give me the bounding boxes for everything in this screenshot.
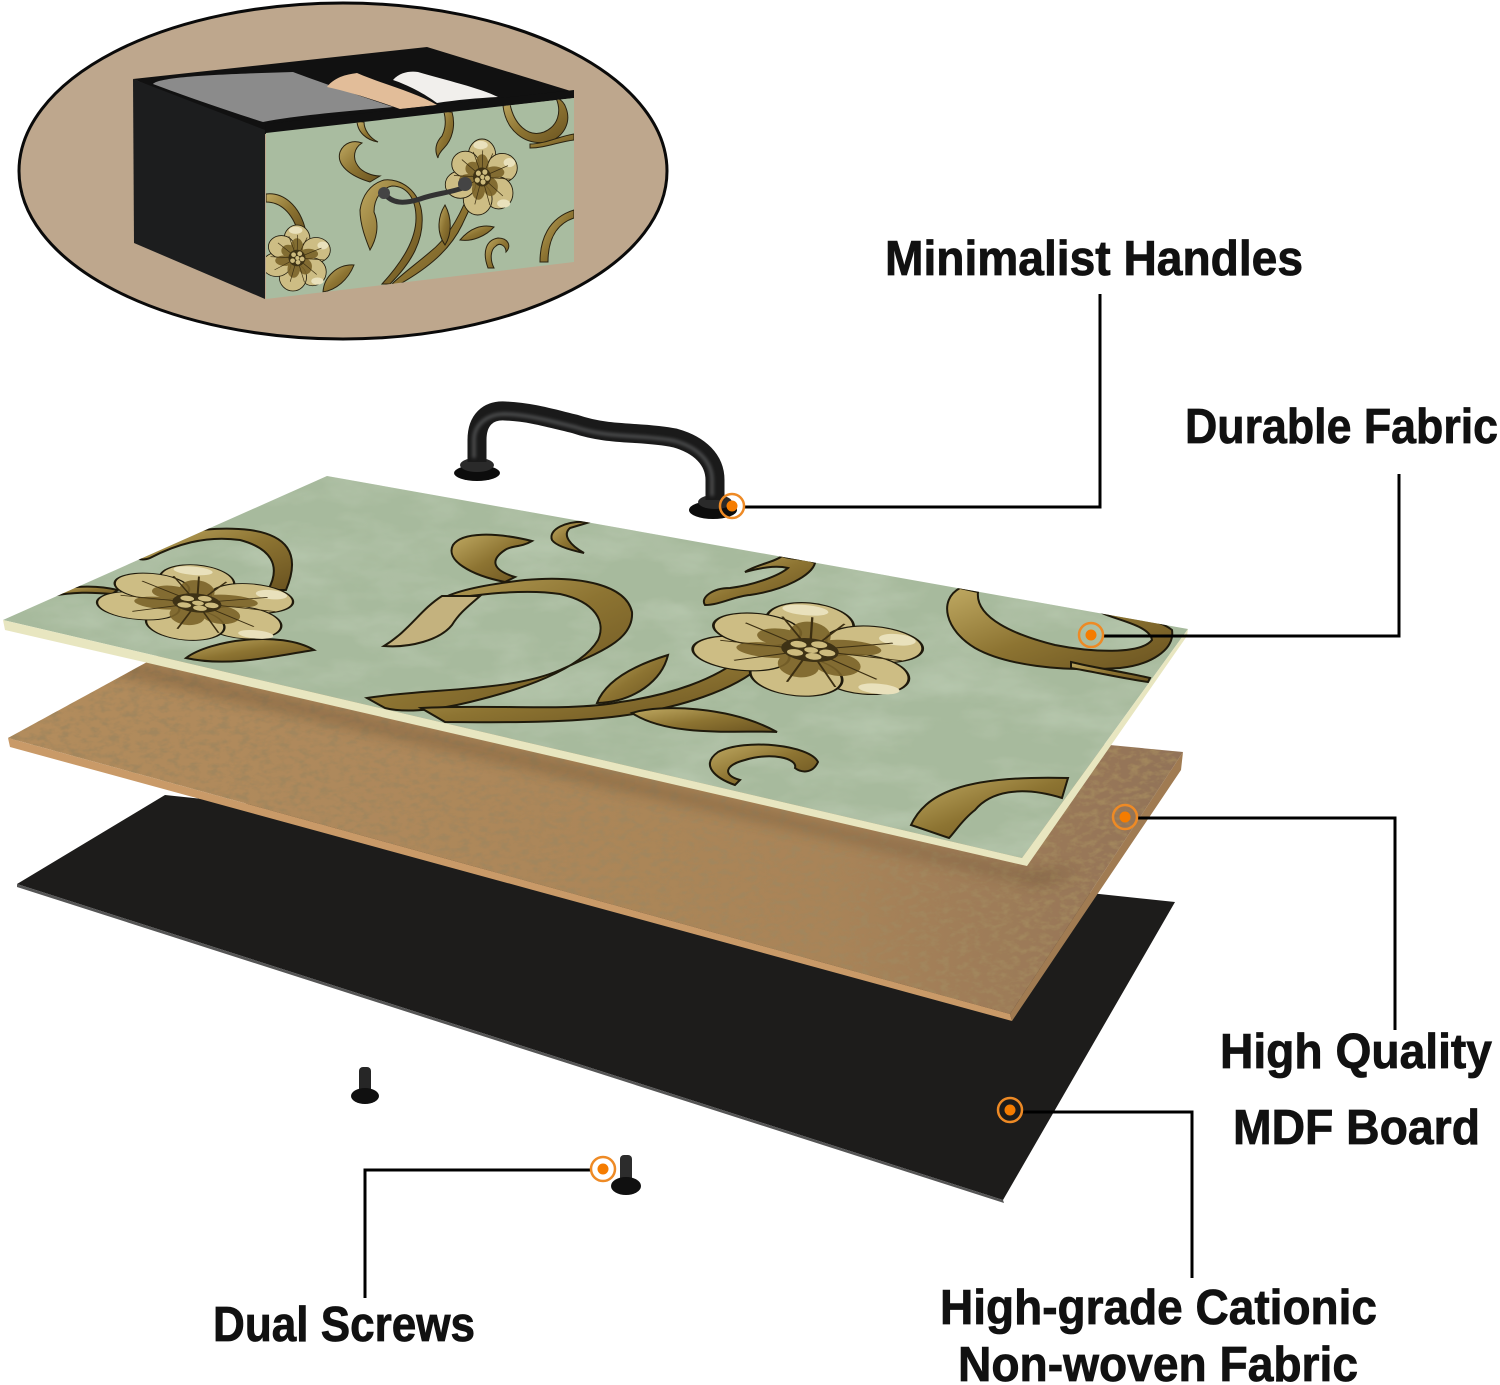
left base (454, 458, 500, 481)
patterned fabric board (3, 476, 1188, 866)
MDF shadow from upper board (117, 662, 1062, 887)
stem leaf upper (597, 655, 668, 703)
floral print (50, 522, 1172, 838)
box top rim (265, 90, 574, 134)
small handle (378, 177, 472, 202)
marker: non-woven (998, 1098, 1022, 1122)
label: Minimalist Handles: Minimalist Handles (885, 232, 1303, 286)
storage box (133, 47, 574, 299)
crescent (551, 522, 590, 553)
leader: MDF (1136, 818, 1395, 1030)
marker: fabric (1079, 623, 1103, 647)
black fabric layer (17, 795, 1175, 1203)
grey towel (153, 72, 393, 122)
MDF edge (8, 738, 1012, 1021)
box interior (133, 47, 574, 134)
lower left leaf (186, 639, 314, 662)
leader: Non-woven (1022, 1112, 1192, 1278)
peach cloth (327, 73, 437, 109)
screw left (351, 1067, 379, 1104)
upper right scroll (704, 556, 815, 605)
box front face (266, 98, 574, 299)
marker: handle (720, 494, 744, 518)
screw right (611, 1155, 641, 1195)
label: High Quality MDF Board: High Quality (1220, 1025, 1492, 1079)
label: High-grade Cationic Non-woven Fabric (940, 1281, 1377, 1385)
handle bar (477, 411, 715, 500)
leader: Durable Fabric (1102, 474, 1399, 636)
right base (689, 495, 737, 519)
label: High Quality MDF Board: MDF Board (1233, 1101, 1480, 1155)
label: Dual Screws: Dual Screws (213, 1298, 475, 1352)
marker: MDF (1113, 805, 1137, 829)
right ring scroll (947, 588, 1172, 669)
front print (262, 98, 574, 292)
small flowers (445, 139, 517, 215)
board edge (3, 620, 1188, 866)
MDF board layer (3, 630, 1183, 1021)
curled leaf (384, 596, 480, 646)
board top surface (3, 476, 1188, 858)
lower scroll (710, 745, 818, 785)
oval backdrop (19, 3, 667, 339)
ring band (1071, 662, 1150, 682)
product photo oval (19, 3, 667, 339)
left flower scroll (130, 529, 292, 590)
handle (454, 411, 737, 519)
marker: screws (591, 1157, 615, 1181)
main scroll (367, 579, 632, 710)
top leaf (452, 535, 532, 582)
leader: Minimalist Handles (744, 294, 1100, 507)
left stem (50, 587, 118, 596)
stem leaf lower (632, 708, 777, 732)
white cloth (393, 72, 498, 103)
stem (418, 668, 750, 724)
bottom right scroll (911, 778, 1068, 838)
flowers (691, 602, 924, 697)
label: High-grade Cationic Non-woven Fabric: High-grade Cationic (940, 1281, 1377, 1335)
leader: screws (365, 1170, 592, 1298)
label: High Quality MDF Board (1220, 1025, 1492, 1155)
box side face (133, 79, 265, 299)
